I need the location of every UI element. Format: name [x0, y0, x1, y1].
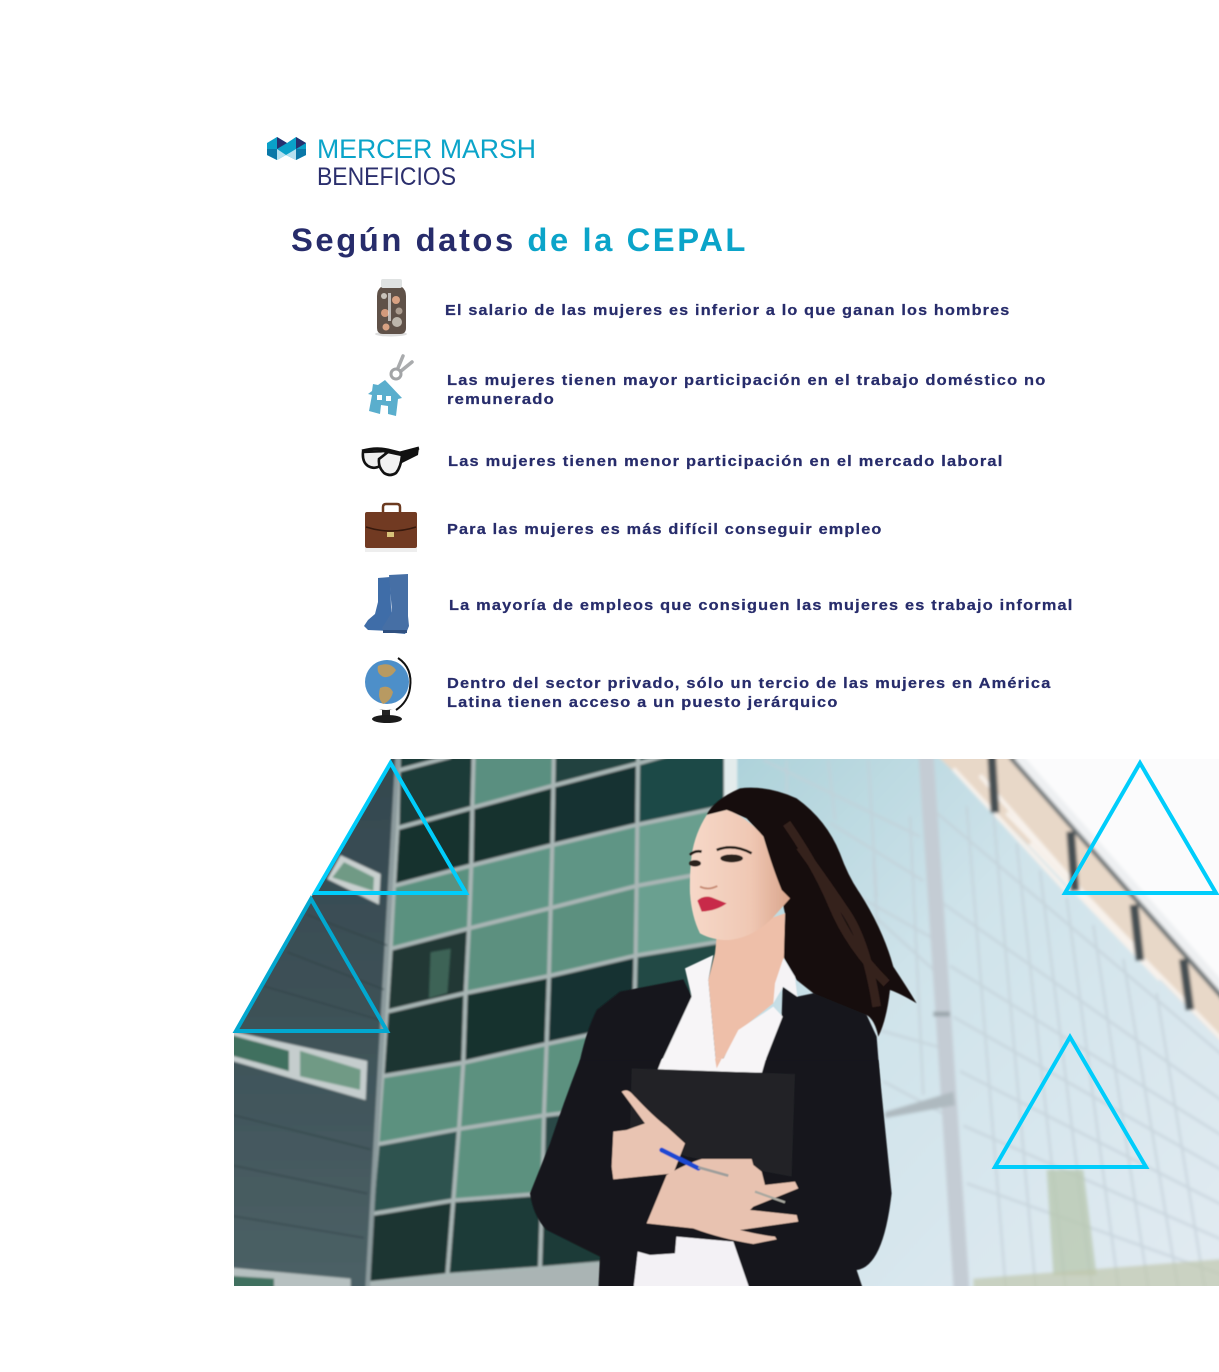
- brows and eyes: [690, 847, 752, 855]
- logo mark: [267, 137, 306, 160]
- text: salario: El salario de las mujeres es inferior a lo que ganan los hombres: [445, 302, 1010, 319]
- text: puesto jerárquico: Dentro del sector privado, sólo un tercio de las mujeres en América: [447, 675, 1052, 692]
- building: green glass windows and dark side panel: [221, 745, 737, 1306]
- right hand: [647, 1159, 798, 1244]
- title: Según datos de la CEPAL: [291, 222, 748, 258]
- text: puesto jerárquico: [447, 675, 1052, 711]
- left hand: [612, 1090, 685, 1179]
- shirt: [661, 954, 716, 1060]
- text: trabajo doméstico: remunerado: [447, 391, 555, 408]
- text: conseguir empleo: Para las mujeres es más difícil conseguir empleo: [447, 521, 882, 538]
- icon: glasses: [362, 448, 419, 475]
- icon: house keychain: [368, 356, 412, 416]
- triangle outline: lower left: [236, 899, 387, 1031]
- text: puesto jerárquico: Latina tienen acceso a un puesto jerárquico: [447, 694, 838, 711]
- woman: arms and folder: [530, 1059, 892, 1290]
- hair: [707, 788, 917, 1037]
- triangle outline: top left: [315, 763, 466, 893]
- shirt hem: [633, 1237, 750, 1290]
- text: trabajo informal: La mayoría de empleos que consiguen las mujeres es trabajo informal: [449, 597, 1074, 614]
- logo: Mercer Marsh Beneficios: [267, 134, 536, 191]
- building: glass facade on the right: [736, 759, 1219, 1286]
- lips: [697, 897, 727, 912]
- text: trabajo doméstico: Las mujeres tienen mayor participación en el trabajo doméstico no: [447, 372, 1046, 389]
- jacket shoulders: [579, 979, 881, 1086]
- woman: upper body: [580, 788, 917, 1100]
- icon: briefcase: [365, 504, 417, 552]
- sleeve cuff: [636, 1236, 677, 1256]
- logo subtitle: BENEFICIOS: [317, 163, 456, 191]
- logo wordmark: MERCER MARSH: [317, 134, 536, 164]
- icon: coin jar: [375, 279, 407, 336]
- photo: businesswoman in front of glass building: [221, 745, 1219, 1306]
- icon: globe: [365, 658, 410, 723]
- folder: [630, 1068, 795, 1177]
- text: trabajo doméstico: [447, 372, 1046, 408]
- jacket body: [530, 1060, 892, 1290]
- face: [690, 810, 790, 940]
- neck and chest: [708, 913, 785, 1070]
- nose shadow: [700, 886, 717, 889]
- pen: [662, 1150, 785, 1202]
- hair highlights: [787, 823, 887, 1007]
- icon: rubber boots: [364, 574, 409, 634]
- triangle outline: bottom right: [995, 1037, 1146, 1167]
- text: mercado laboral: Las mujeres tienen menor participación en el mercado laboral: [448, 453, 1004, 470]
- triangle outline: top right: [1065, 763, 1216, 893]
